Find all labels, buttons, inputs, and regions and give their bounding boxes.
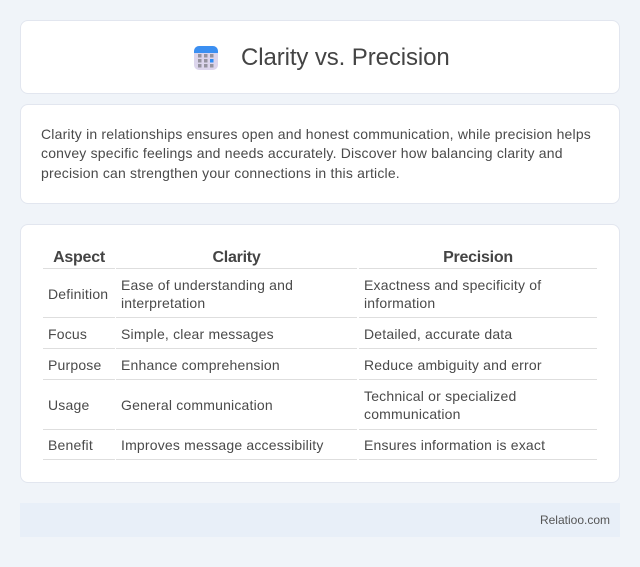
row: focus: Simple, clear messages <box>121 326 274 342</box>
intro text: convey specific feelings and needs accurately. Discover how balancing clarity and <box>41 145 563 161</box>
row: usage: communication <box>364 406 461 422</box>
table header: Aspect <box>53 249 105 266</box>
row: purpose: Reduce ambiguity and error <box>364 357 542 373</box>
footer bar <box>20 503 620 537</box>
row: benefit: Benefit <box>48 437 93 453</box>
row: definition: Exactness and specificity of <box>364 277 541 293</box>
row: focus: Focus <box>48 326 87 342</box>
icon: calendar <box>194 46 218 70</box>
table header: Clarity <box>212 249 261 266</box>
row: focus: Detailed, accurate data <box>364 326 512 342</box>
table header: Precision <box>443 249 513 266</box>
row: benefit <box>48 437 545 453</box>
row: focus <box>48 326 512 342</box>
row: benefit: Ensures information is exact <box>364 437 545 453</box>
row: definition: information <box>364 295 435 311</box>
table header <box>53 249 513 266</box>
row: purpose <box>48 357 542 373</box>
row: usage <box>48 388 516 422</box>
row: usage: Usage <box>48 397 89 413</box>
row: purpose: Enhance comprehension <box>121 357 280 373</box>
row: purpose: Purpose <box>48 357 101 373</box>
intro text: precision can strengthen your connections in this article. <box>41 165 400 181</box>
panel: introduction <box>20 104 620 204</box>
title: Clarity vs. Precision <box>241 44 450 71</box>
row: definition: Ease of understanding and <box>121 277 293 293</box>
intro text: Clarity in relationships ensures open and honest communication, while precision helps <box>41 126 591 142</box>
row: usage: General communication <box>121 397 273 413</box>
row: definition <box>48 277 542 311</box>
panel: comparison table <box>20 224 620 483</box>
intro text <box>41 126 591 181</box>
row: definition: Definition <box>48 286 108 302</box>
footer text: Relatioo.com <box>540 513 610 527</box>
panel: title card <box>20 20 620 94</box>
row: definition: interpretation <box>121 295 205 311</box>
row: usage: Technical or specialized <box>364 388 516 404</box>
row: benefit: Improves message accessibility <box>121 437 324 453</box>
